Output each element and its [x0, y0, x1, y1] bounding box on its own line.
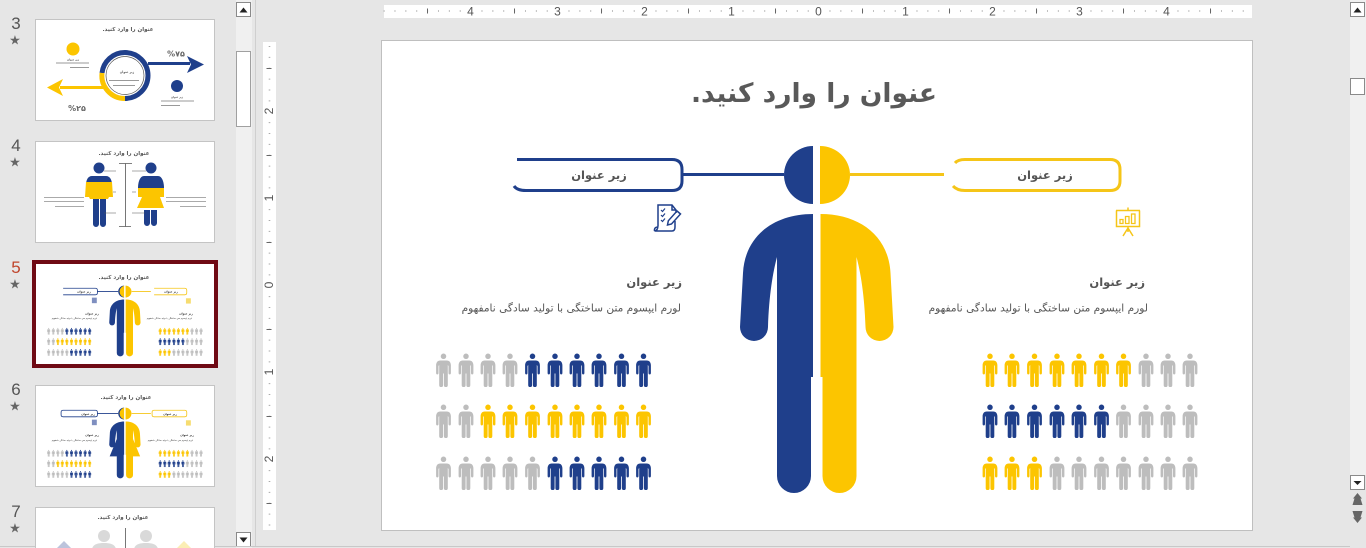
right row 3: 3 yellow, 7 grey: [983, 457, 1197, 490]
horizontal ruler: 3: [554, 4, 561, 18]
slide thumbnail 4: [9, 136, 214, 242]
slide thumbnail 3: زیر عنوان: [171, 96, 184, 99]
slide thumbnail 5 (selected): ★: [9, 278, 21, 292]
slide thumbnail 5 (selected): زیر عنوان: [164, 290, 178, 294]
slide thumbnail 5 (selected): عنوان را وارد کنید.: [98, 274, 150, 281]
right heading: زیر عنوان: [1089, 275, 1145, 290]
horizontal ruler: 1: [728, 4, 735, 18]
title: عنوان را وارد کنید.: [691, 78, 937, 109]
horizontal ruler: 1: [902, 4, 909, 18]
slide thumbnail 3: %۲۵: [68, 104, 86, 113]
left heading: زیر عنوان: [626, 275, 682, 290]
body: left blue half: [740, 214, 813, 493]
slide thumbnail 7: عنوان را وارد کنید.: [97, 514, 149, 521]
slide thumbnail 6: ★: [9, 400, 21, 414]
slide thumbnail 7: 7: [11, 502, 21, 521]
right scrollbar: [1350, 0, 1366, 523]
horizontal ruler: 3: [1076, 4, 1083, 18]
right row 1: 7 yellow, 3 grey: [983, 354, 1197, 387]
vertical ruler: 2: [262, 107, 276, 114]
bottom status line: [0, 546, 1350, 547]
slide thumbnail 6: 6: [11, 380, 21, 399]
slide thumbnail 3: عنوان را وارد کنید.: [102, 26, 154, 33]
slide thumbnail 3: 3: [11, 14, 21, 33]
slide thumbnail 3: زیر عنوان: [120, 70, 135, 74]
horizontal ruler: 4: [467, 4, 474, 18]
head: left blue half: [784, 146, 813, 204]
right subtitle pill: [953, 160, 1120, 190]
left row 3: 5 grey, 5 blue: [436, 457, 651, 490]
thumbnail scrollbar: [236, 0, 252, 548]
vertical ruler: 1: [262, 368, 276, 375]
slide thumbnail 6: عنوان را وارد کنید.: [100, 394, 152, 401]
slide thumbnail 4: عنوان را وارد کنید.: [98, 150, 150, 157]
slide thumbnail 6: لورم ایپسوم متن ساختگی با تولید سادگی نامفهوم: [148, 439, 193, 442]
slide thumbnail 6: زیر عنوان: [180, 433, 194, 437]
slide thumbnail 5 (selected): 5: [11, 258, 21, 277]
slide thumbnail 6: لورم ایپسوم متن ساختگی با تولید سادگی نامفهوم: [52, 439, 97, 442]
slide thumbnail 3: %۷۵: [167, 50, 185, 58]
left subtitle pill: زیر عنوان: [571, 168, 627, 183]
right row 2: 6 blue, 4 grey: [983, 405, 1197, 438]
slide thumbnail 7: ★: [9, 522, 21, 536]
slide thumbnail 5 (selected): زیر عنوان: [85, 312, 99, 316]
slide thumbnail 3: ★: [9, 34, 21, 48]
horizontal ruler: [384, 4, 1252, 18]
left description: لورم ایپسوم متن ساختگی با تولید سادگی نامفهوم: [462, 302, 681, 314]
slide thumbnail 3: [9, 14, 214, 120]
left pictogram chart: [436, 354, 651, 490]
slide thumbnail 6: زیر عنوان: [85, 433, 99, 437]
horizontal ruler: 0: [815, 4, 822, 18]
main slide canvas: [382, 40, 1252, 530]
slide thumbnail 6: [9, 380, 214, 486]
slide thumbnail 5 (selected): لورم ایپسوم متن ساختگی با تولید سادگی نامفهوم: [52, 317, 97, 320]
left connector line: [682, 173, 784, 176]
left row 2: 2 grey, 8 yellow: [436, 405, 651, 438]
slide thumbnail 4: ★: [9, 156, 21, 170]
right description: لورم ایپسوم متن ساختگی با تولید سادگی نامفهوم: [929, 302, 1148, 314]
right connector line: [850, 173, 944, 176]
vertical ruler: 1: [262, 194, 276, 201]
vertical ruler: 0: [262, 281, 276, 288]
body: right yellow half: [820, 214, 894, 493]
slide thumbnail 4: 4: [11, 136, 21, 155]
vertical ruler: [262, 42, 276, 530]
vertical ruler: 2: [262, 455, 276, 462]
slide thumbnail 5 (selected): زیر عنوان: [77, 290, 91, 294]
icon: presentation board: [1116, 208, 1140, 236]
slide thumbnail 5 (selected): زیر عنوان: [179, 312, 193, 316]
left subtitle pill: [514, 160, 682, 190]
central person figure: [740, 146, 894, 493]
slide thumbnail 6: زیر عنوان: [163, 412, 177, 416]
slide thumbnail 5 (selected): [9, 258, 216, 366]
slide thumbnail 5 (selected): لورم ایپسوم متن ساختگی با تولید سادگی نامفهوم: [147, 317, 192, 320]
right subtitle pill: زیر عنوان: [1017, 168, 1073, 183]
icon: checklist with pencil: [654, 205, 680, 231]
horizontal ruler: 4: [1163, 4, 1170, 18]
head: right yellow half: [820, 146, 850, 204]
slide thumbnail 6: زیر عنوان: [81, 412, 95, 416]
slide thumbnail 3: زیر عنوان: [67, 58, 80, 62]
right pictogram chart: [983, 354, 1197, 490]
horizontal ruler: 2: [989, 4, 996, 18]
slide thumbnail 7: [9, 502, 214, 548]
pane separator: [255, 0, 256, 546]
left row 1: 4 grey, 6 blue: [436, 354, 651, 387]
horizontal ruler: 2: [641, 4, 648, 18]
